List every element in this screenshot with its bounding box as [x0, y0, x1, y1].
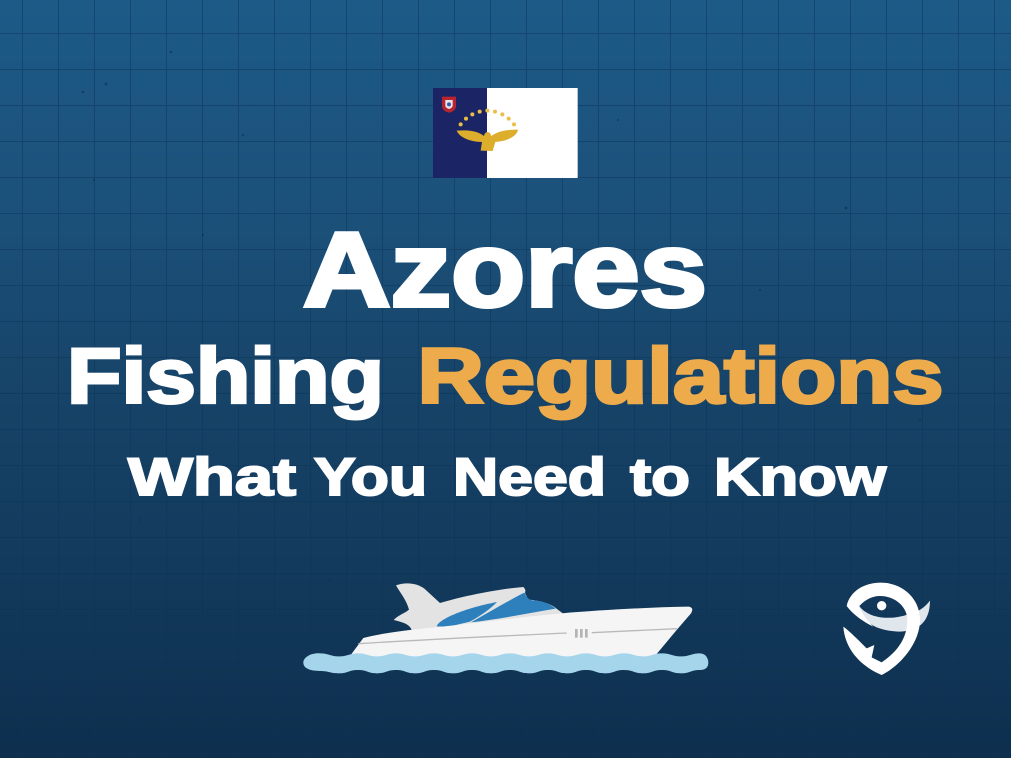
subtitle: What You Need to Know: to [630, 448, 690, 507]
heading: Fishing Regulations [67, 332, 944, 420]
subtitle: What You Need to Know [128, 448, 887, 507]
heading: Fishing Regulations: Fishing [67, 332, 384, 420]
subtitle: What You Need to Know: What [128, 448, 296, 507]
heading: Fishing Regulations: Regulations [418, 332, 944, 420]
subtitle: What You Need to Know: Know [714, 448, 887, 507]
water waves [303, 653, 708, 673]
boat hull [348, 607, 692, 662]
boat superstructure [394, 583, 564, 630]
title: Azores: Azores [303, 211, 707, 329]
icon: fish hook logo [843, 583, 930, 675]
subtitle: What You Need to Know: You [314, 448, 427, 507]
icon: Azores flag [433, 88, 578, 178]
hook outline [843, 583, 920, 675]
fish eye [877, 601, 886, 610]
icon: motor yacht on waves [303, 583, 708, 673]
subtitle: What You Need to Know: Need [453, 448, 606, 507]
fish body band and tail [859, 601, 930, 632]
windows [437, 602, 497, 627]
